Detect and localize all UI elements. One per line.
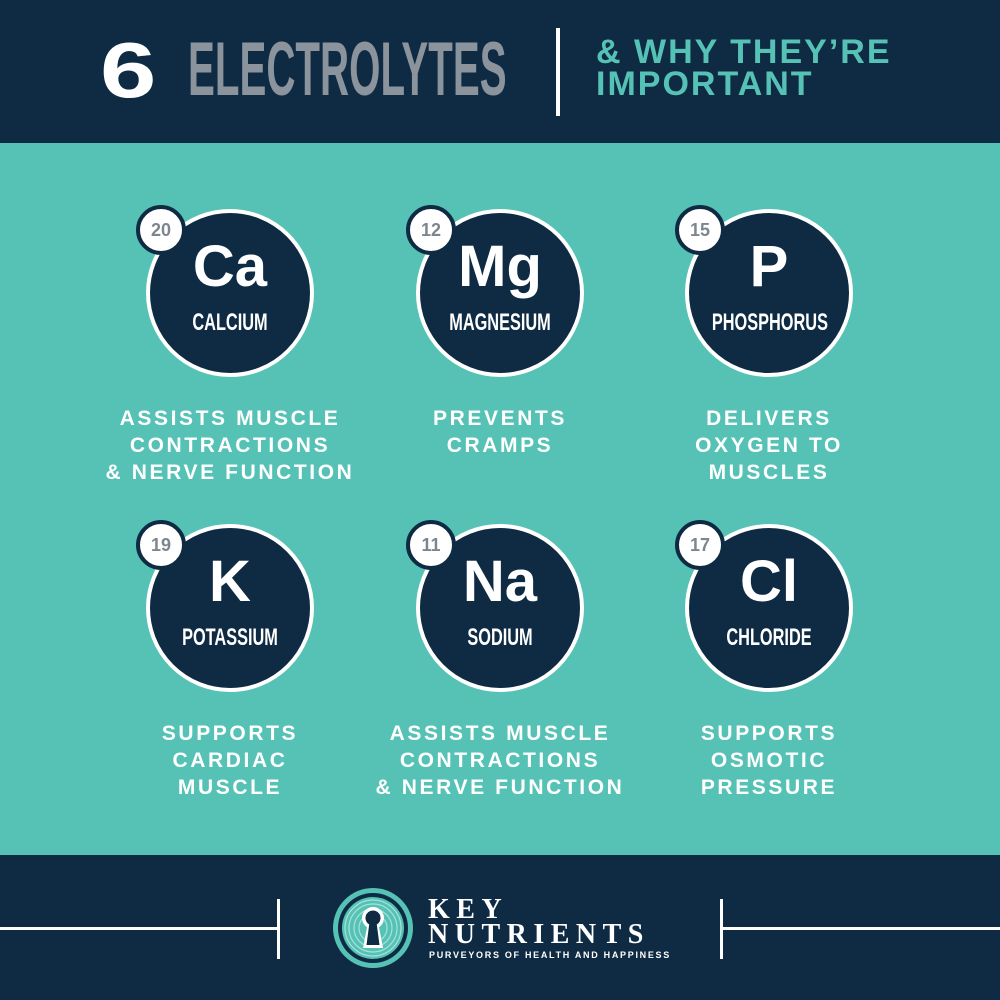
title: electrolytes: ELECTROLYTES [188, 27, 507, 112]
element: potassium: POTASSIUM [182, 624, 278, 651]
subtitle [596, 33, 892, 103]
element: calcium [136, 205, 314, 377]
desc: chloride: PRESSURE [701, 776, 837, 799]
element: potassium: 19 [151, 535, 171, 555]
desc: magnesium [433, 407, 567, 457]
desc: chloride [701, 722, 837, 799]
footer bar [0, 855, 1000, 1000]
left line [0, 927, 279, 930]
desc: magnesium: PREVENTS [433, 407, 567, 430]
element: calcium: Ca [193, 234, 267, 299]
brand name: KEY [428, 894, 508, 925]
subtitle: IMPORTANT [596, 65, 814, 103]
desc: chloride: SUPPORTS [701, 722, 837, 745]
desc: potassium: MUSCLE [178, 776, 282, 799]
element: sodium [406, 520, 584, 692]
element: chloride: Cl [740, 549, 798, 614]
element: phosphorus: PHOSPHORUS [712, 309, 828, 336]
right line [722, 927, 1000, 930]
element: potassium [136, 520, 314, 692]
element: chloride: 17 [690, 535, 710, 555]
desc: sodium: ASSISTS MUSCLE [390, 722, 610, 745]
element: phosphorus [675, 205, 853, 377]
element: calcium: CALCIUM [192, 309, 268, 336]
desc: potassium [162, 722, 298, 799]
desc: sodium: CONTRACTIONS [400, 749, 600, 772]
subtitle: & WHY THEY’RE [596, 33, 892, 71]
desc: potassium: CARDIAC [172, 749, 288, 772]
title: 6: 6 [100, 26, 156, 114]
desc: calcium: CONTRACTIONS [130, 434, 330, 457]
logo icon: keyhole [333, 888, 413, 968]
element: phosphorus: 15 [690, 220, 710, 240]
tagline: PURVEYORS OF HEALTH AND HAPPINESS [429, 950, 671, 960]
element: sodium: SODIUM [467, 624, 533, 651]
desc: potassium: SUPPORTS [162, 722, 298, 745]
element: sodium: Na [463, 549, 537, 614]
brand name: NUTRIENTS [428, 919, 650, 950]
element: chloride [675, 520, 853, 692]
desc: chloride: OSMOTIC [711, 749, 827, 772]
element: sodium: 11 [421, 535, 441, 555]
desc: calcium: & NERVE FUNCTION [106, 461, 354, 484]
element: potassium: K [209, 549, 251, 614]
element: magnesium [406, 205, 584, 377]
divider [556, 28, 560, 116]
desc: calcium: ASSISTS MUSCLE [120, 407, 340, 430]
header bar [0, 0, 1000, 143]
desc: calcium [106, 407, 354, 484]
desc: phosphorus: DELIVERS [706, 407, 832, 430]
desc: magnesium: CRAMPS [447, 434, 553, 457]
desc: sodium [376, 722, 624, 799]
element: magnesium: Mg [458, 234, 542, 299]
element: magnesium: MAGNESIUM [449, 309, 551, 336]
desc: sodium: & NERVE FUNCTION [376, 776, 624, 799]
desc: phosphorus [695, 407, 843, 484]
element: magnesium: 12 [421, 220, 441, 240]
element: chloride: CHLORIDE [726, 624, 812, 651]
element: phosphorus: P [750, 234, 788, 299]
element: calcium: 20 [151, 220, 171, 240]
desc: phosphorus: OXYGEN TO [695, 434, 843, 457]
desc: phosphorus: MUSCLES [709, 461, 829, 484]
brand name [428, 894, 650, 950]
